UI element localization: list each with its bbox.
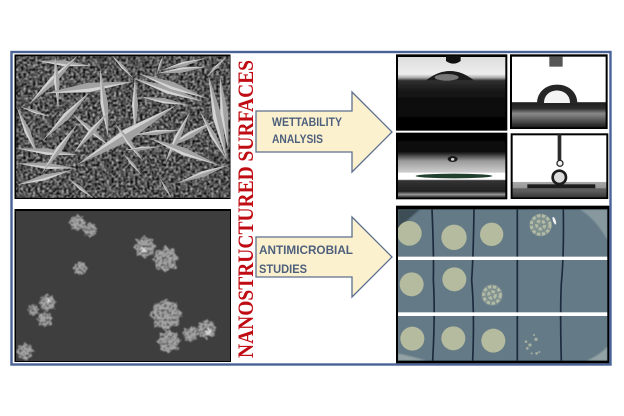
label: antimicrobial studies: ANTIMICROBIAL [259, 243, 353, 257]
panel: antimicrobial agar plate [396, 206, 609, 363]
marker lines [432, 209, 563, 361]
droplet image: top right [510, 54, 608, 129]
panel: SEM image of nanoflower clusters [14, 209, 231, 362]
arrow: wettability analysis [256, 92, 392, 172]
nanoflower clusters [16, 214, 217, 361]
label: antimicrobial studies: STUDIES [259, 262, 307, 276]
label: wettability analysis: WETTABILITY [272, 117, 342, 129]
droplet image: top left [396, 54, 507, 131]
droplet image: bottom right [511, 133, 608, 199]
droplet image: bottom left [396, 133, 507, 199]
panel: SEM image of nanoneedles [14, 52, 232, 200]
bacterial colonies [397, 214, 552, 355]
vertical title: NANOSTRUCTURED SURFACES [233, 60, 258, 358]
arrow: antimicrobial studies [256, 217, 392, 297]
label: wettability analysis: ANALYSIS [272, 134, 323, 146]
outer frame [12, 52, 610, 364]
wettability droplet images [396, 54, 608, 199]
